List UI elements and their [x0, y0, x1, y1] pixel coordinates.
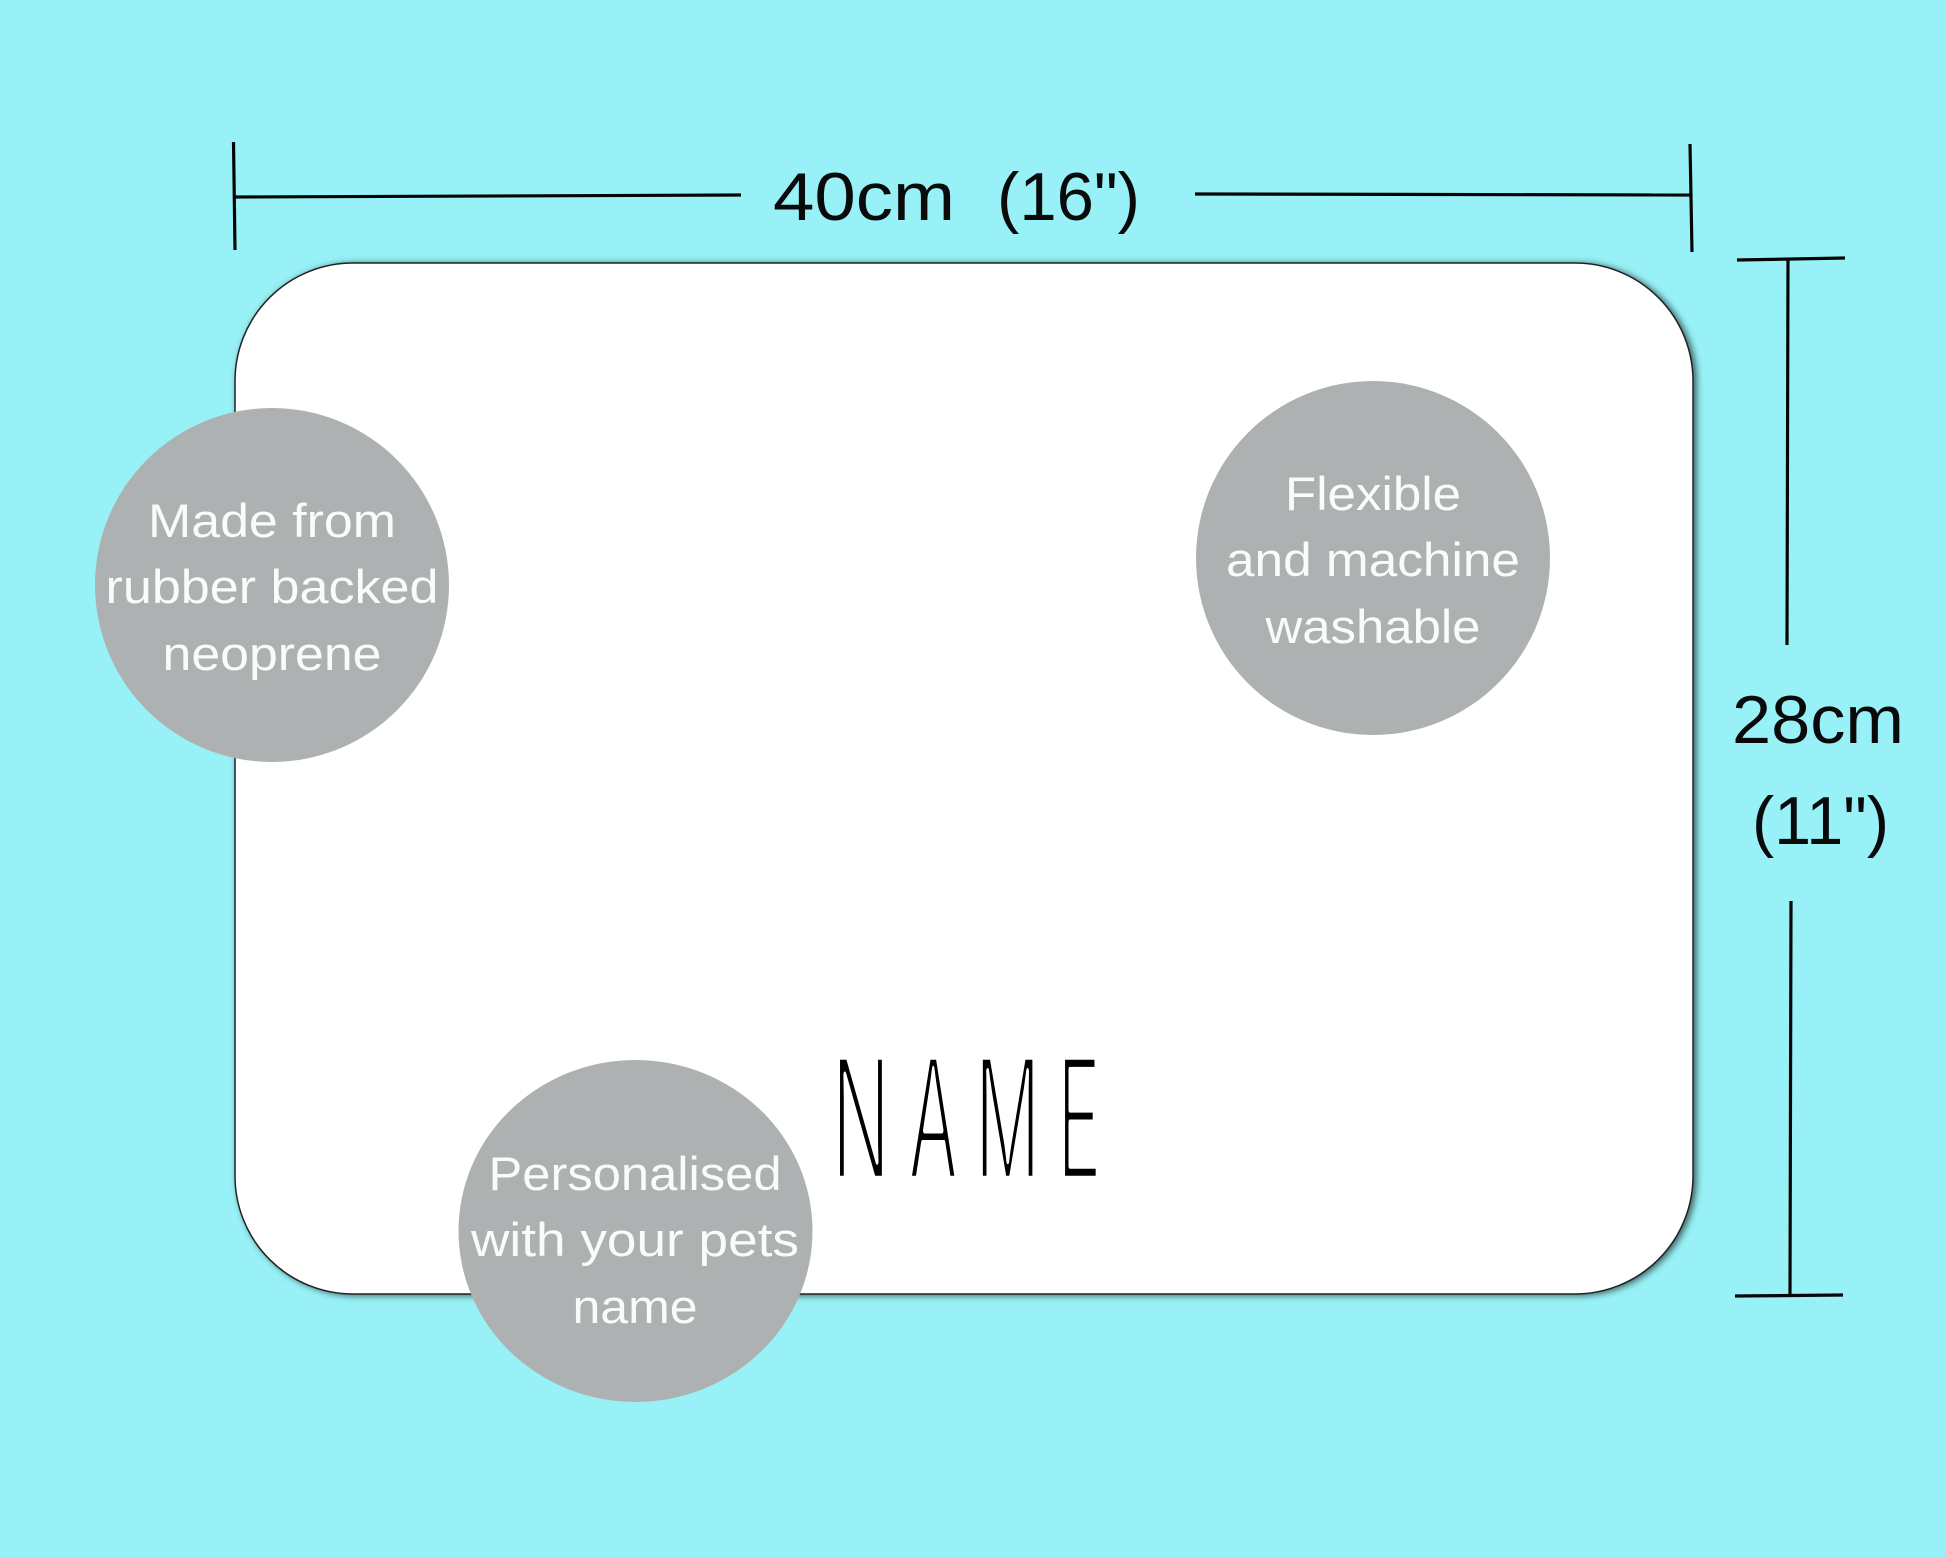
name text on mat: [832, 1018, 1099, 1218]
width line left: [234, 195, 741, 197]
height label line 2: (11"): [1752, 783, 1889, 859]
name text on mat: E: [1059, 1020, 1099, 1218]
name text on mat: M: [975, 1020, 1040, 1218]
callout: flexible: Flexible: [1285, 467, 1461, 520]
left tick: [234, 142, 235, 250]
name text on mat: N: [832, 1019, 890, 1218]
callout: personalised: Personalised: [488, 1147, 782, 1200]
callout: flexible: washable: [1264, 600, 1480, 653]
callout: material: neoprene: [162, 627, 382, 680]
bottom cap: [1735, 1295, 1843, 1296]
right tick: [1690, 144, 1692, 252]
height line lower: [1790, 901, 1791, 1296]
width dimension: 40cm (16"): [234, 142, 1692, 252]
callout: personalised: [458, 1060, 812, 1402]
height label line 1: 28cm: [1732, 682, 1904, 758]
width label: imperial: (16"): [997, 159, 1140, 235]
callout: material: Made from: [148, 494, 396, 547]
callout: flexible: and machine: [1226, 533, 1520, 586]
callout: personalised: name: [572, 1280, 698, 1333]
callout: material: rubber backed: [106, 560, 438, 613]
width line right: [1195, 194, 1692, 195]
height dimension: 28cm (11"): [1732, 258, 1904, 1296]
width label: metric: 40cm: [773, 159, 955, 235]
callout: personalised: with your pets: [470, 1213, 799, 1266]
name text on mat: A: [910, 1018, 956, 1217]
top cap: [1737, 258, 1845, 260]
height line upper: [1787, 258, 1788, 645]
callout: material: [95, 408, 449, 762]
panel: white mat: [235, 263, 1693, 1294]
callout: flexible: [1196, 381, 1550, 735]
